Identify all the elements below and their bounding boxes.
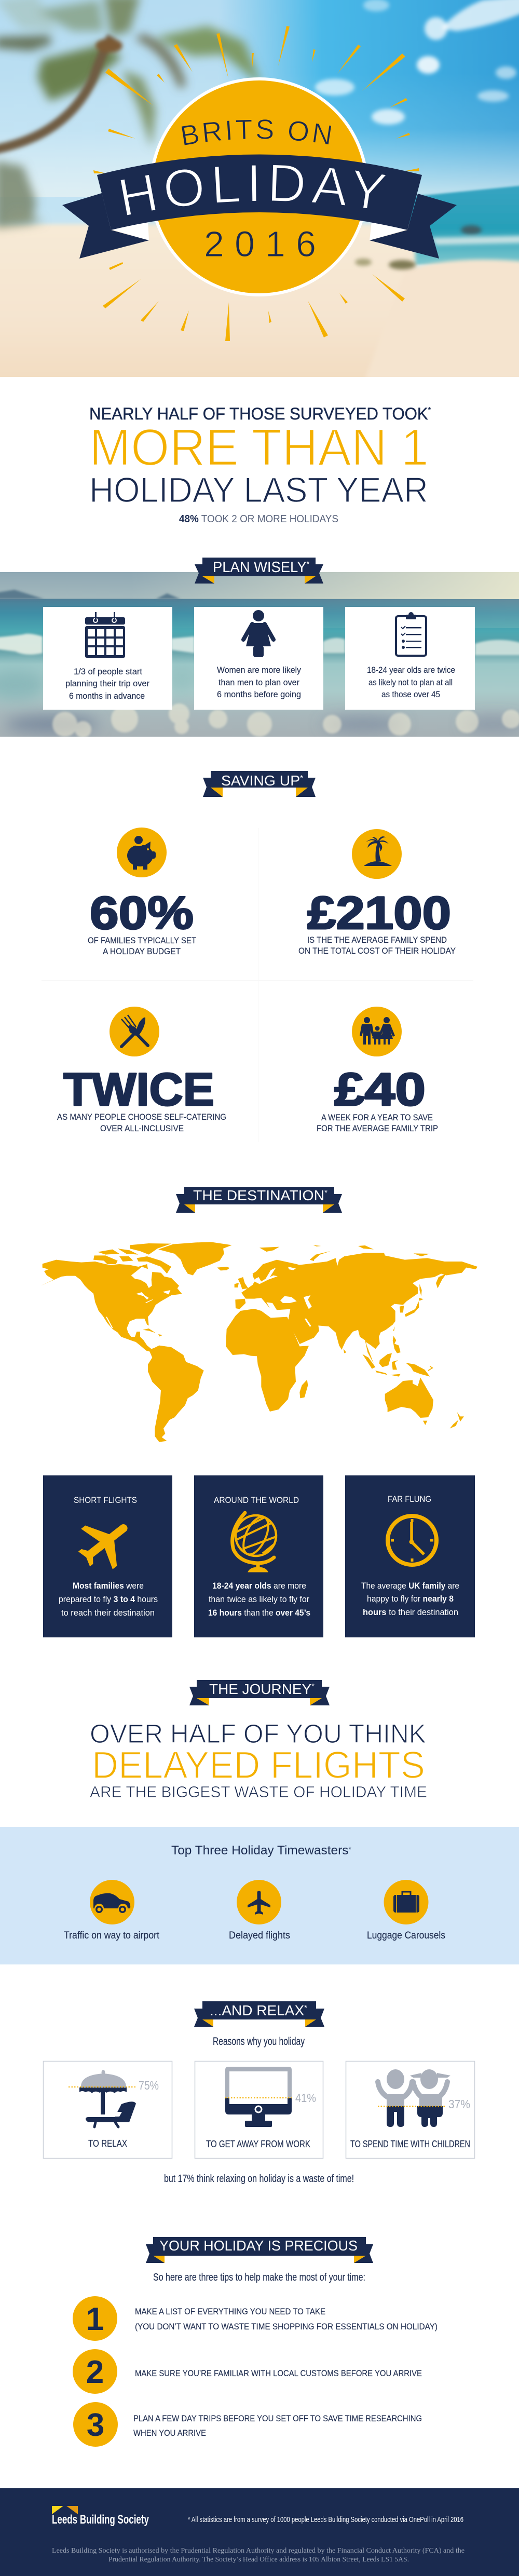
eurasia, africa and oceania: [226, 1245, 477, 1429]
title: brits on: BRITS ON: [182, 119, 331, 145]
panel: stat 60%: OF FAMILIES TYPICALLY SET: [88, 936, 196, 945]
panel: to get away from work: 41%: [295, 2091, 316, 2105]
panel: plan card 1: [43, 607, 172, 710]
intro headline: MORE THAN 1: [89, 418, 429, 477]
panel: plan card 3: 18-24 year olds are twice: [367, 665, 455, 675]
intro headline: 48% TOOK 2 OR MORE HOLIDAYS: [179, 513, 338, 525]
icon: monitor: [225, 2067, 292, 2127]
panel: stat £40: £40: [334, 1063, 426, 1115]
tip 3: PLAN A FEW DAY TRIPS BEFORE YOU SET OFF TO SAVE TIME RESEARCHING: [133, 2414, 422, 2423]
panel: stat £40: FOR THE AVERAGE FAMILY TRIP: [317, 1123, 438, 1133]
panel: around the world: AROUND THE WORLD: [214, 1495, 299, 1505]
tip 3: WHEN YOU ARRIVE: [133, 2428, 206, 2438]
section ribbon: saving up: [203, 771, 316, 797]
tip 1: MAKE A LIST OF EVERYTHING YOU NEED TO TAKE: [135, 2307, 325, 2316]
tip 3: 3: [87, 2407, 104, 2443]
panel: to spend time with children: 37%: [448, 2097, 470, 2111]
panel: around the world: than twice as likely to fly for: [209, 1594, 309, 1604]
panel: stat twice: [57, 1007, 226, 1133]
ribbon folds: [111, 222, 149, 240]
intro headline: HOLIDAY LAST YEAR: [89, 470, 428, 510]
icon: calendar: [85, 612, 125, 658]
sun rays: [93, 26, 419, 341]
section ribbon: and relax: ...AND RELAX: [210, 2002, 304, 2018]
panel: to get away from work: [195, 2061, 323, 2159]
panel: stat 60%: 60%: [90, 887, 194, 939]
panel: top three timewasters: [0, 1827, 519, 1964]
tip 3: [73, 2402, 422, 2447]
panel: far flung: The average UK family are: [361, 1581, 459, 1591]
tip 2: 2: [86, 2354, 104, 2390]
section ribbon: and relax: *: [304, 2003, 307, 2012]
icon: parasol and lounger: [79, 2070, 136, 2127]
panel: around the world: 16 hours than the over 45’s: [208, 1608, 310, 1618]
icon: aeroplane: [69, 1506, 142, 1579]
panel: short flights: SHORT FLIGHTS: [74, 1495, 137, 1505]
icon: globe: [230, 1509, 283, 1572]
tip 2: MAKE SURE YOU’RE FAMILIAR WITH LOCAL CUSTOMS BEFORE YOU ARRIVE: [135, 2368, 422, 2378]
icon: clipboard: [396, 612, 426, 656]
section ribbon: your holiday is precious: [146, 2237, 373, 2263]
tip 2: [73, 2349, 422, 2394]
icon: suitcase: [384, 1880, 429, 1924]
panel: top three timewasters: *: [348, 1845, 352, 1853]
legal text: Leeds Building Society is authorised by the Prudential Regulation Authority and regulated by the Financial Conduct Authority (FCA) and the: [52, 2547, 465, 2555]
icon: woman: [243, 610, 274, 657]
section ribbon: the destination: [176, 1187, 342, 1213]
title: 2016: 2016: [204, 224, 316, 264]
panel: plan card 3: as likely not to plan at all: [368, 677, 453, 687]
section ribbon: your holiday is precious: YOUR HOLIDAY IS PRECIOUS: [159, 2238, 358, 2254]
panel: far flung: happy to fly for nearly 8: [367, 1594, 454, 1604]
panel: to relax: TO RELAX: [88, 2138, 127, 2149]
panel: stat £2100: IS THE THE AVERAGE FAMILY SPEND: [307, 935, 447, 945]
section ribbon: plan wisely: *: [306, 560, 309, 568]
panel: top three timewasters: Top Three Holiday Timewasters: [171, 1843, 346, 1858]
icon: plane: [237, 1880, 281, 1924]
panel: stat £40: A WEEK FOR A YEAR TO SAVE: [321, 1113, 433, 1122]
section ribbon: plan wisely: [195, 558, 323, 584]
panel: stat £2100: [298, 829, 456, 956]
panel: plan card 2: [194, 607, 323, 710]
panel: plan card 2: 6 months before going: [217, 689, 301, 699]
panel: short flights: prepared to fly 3 to 4 hours: [59, 1594, 158, 1604]
tips intro text: So here are three tips to help make the most of your time:: [153, 2272, 365, 2283]
panel: short flights: Most families were: [73, 1581, 144, 1591]
logo: leeds building society: [52, 2506, 149, 2527]
relax closing text: but 17% think relaxing on holiday is a waste of time!: [164, 2173, 354, 2185]
section ribbon: the journey: [189, 1680, 330, 1705]
icon: palm island: [352, 829, 402, 879]
journey headline: OVER HALF OF YOU THINK: [90, 1719, 426, 1748]
icon: piggy bank: [117, 828, 167, 877]
ribbon tails: [62, 193, 149, 259]
world map: [40, 1242, 477, 1442]
americas: [40, 1242, 260, 1442]
sea photo background: [0, 572, 519, 738]
relax intro text: Reasons why you holiday: [213, 2036, 305, 2048]
panel: stat twice: TWICE: [63, 1063, 214, 1115]
panel: stat twice: OVER ALL-INCLUSIVE: [100, 1123, 184, 1133]
tip 1: [73, 2296, 438, 2341]
icon: family: [352, 1007, 402, 1056]
panel: stat twice: AS MANY PEOPLE CHOOSE SELF-CATERING: [57, 1112, 226, 1122]
section ribbon: the journey: *: [311, 1682, 315, 1691]
panel: top three timewasters: Traffic on way to airport: [64, 1930, 160, 1941]
icon: children: [378, 2069, 450, 2127]
panel: plan card 3: as those over 45: [381, 689, 440, 699]
footer: [0, 2488, 519, 2576]
title: holiday: HOLIDAY: [120, 165, 386, 215]
panel: plan card 1: 6 months in advance: [69, 691, 145, 701]
panel: plan card 1: 1/3 of people start: [74, 667, 142, 676]
panel: stat £2100: £2100: [307, 887, 451, 939]
hero badge: [62, 26, 457, 341]
panel: around the world: 18-24 year olds are more: [212, 1581, 306, 1591]
section ribbon: the destination: *: [324, 1188, 327, 1197]
panel: far flung: FAR FLUNG: [388, 1494, 431, 1504]
panel: far flung: hours to their destination: [363, 1607, 458, 1617]
tip 1: (YOU DON’T WANT TO WASTE TIME SHOPPING FOR ESSENTIALS ON HOLIDAY): [135, 2322, 438, 2331]
panel: plan card 1: planning their trip over: [65, 679, 149, 688]
panel: stat £40: [317, 1007, 438, 1133]
tip 1: 1: [86, 2301, 104, 2337]
panel: short flights: to reach their destination: [61, 1608, 155, 1618]
intro headline: NEARLY HALF OF THOSE SURVEYED TOOK: [89, 404, 437, 423]
panel: top three timewasters: Luggage Carousels: [367, 1930, 445, 1941]
panel: plan card 3: [345, 607, 475, 710]
journey headline: [90, 1719, 427, 1801]
intro headline: [89, 404, 431, 525]
panel: to spend time with children: [346, 2061, 474, 2159]
panel: stat 60%: A HOLIDAY BUDGET: [103, 946, 181, 956]
section ribbon: and relax: [194, 2001, 324, 2027]
journey headline: DELAYED FLIGHTS: [92, 1744, 425, 1786]
section ribbon: saving up: SAVING UP: [221, 772, 299, 789]
panel: to relax: 75%: [139, 2079, 159, 2092]
section ribbon: the destination: THE DESTINATION: [193, 1187, 323, 1203]
ribbon band: [97, 155, 422, 230]
panel: to relax: [44, 2061, 172, 2159]
icon: clock: [388, 1516, 436, 1565]
legal text: [52, 2547, 465, 2564]
section ribbon: the journey: THE JOURNEY: [209, 1681, 312, 1697]
intro headline: *: [428, 405, 431, 414]
panel: top three timewasters: Delayed flights: [229, 1930, 290, 1941]
journey headline: ARE THE BIGGEST WASTE OF HOLIDAY TIME: [90, 1783, 427, 1801]
section ribbon: saving up: *: [300, 774, 303, 782]
panel: to get away from work: TO GET AWAY FROM WORK: [206, 2139, 310, 2149]
panel: plan card 2: than men to plan over: [218, 677, 299, 687]
sun disc: [151, 79, 367, 295]
hero beach photo background: [0, 0, 519, 385]
panel: stat £2100: ON THE TOTAL COST OF THEIR HOLIDAY: [298, 946, 456, 956]
icon: car: [90, 1880, 134, 1924]
logo: leeds building society: Leeds Building Society: [52, 2513, 149, 2527]
legal text: Prudential Regulation Authority. The Society’s Head Office address is 105 Albion Street, Leeds LS1 5AS.: [108, 2556, 409, 2564]
panel: short flights: [43, 1475, 172, 1637]
panel: plan card 2: Women are more likely: [217, 665, 301, 675]
icon: knife and fork: [110, 1007, 159, 1056]
section ribbon: plan wisely: PLAN WISELY: [213, 559, 312, 576]
panel: far flung: [345, 1475, 475, 1637]
panel: around the world: [194, 1475, 323, 1637]
panel: to spend time with children: TO SPEND TIME WITH CHILDREN: [350, 2139, 470, 2149]
panel: stat 60%: [88, 828, 196, 956]
